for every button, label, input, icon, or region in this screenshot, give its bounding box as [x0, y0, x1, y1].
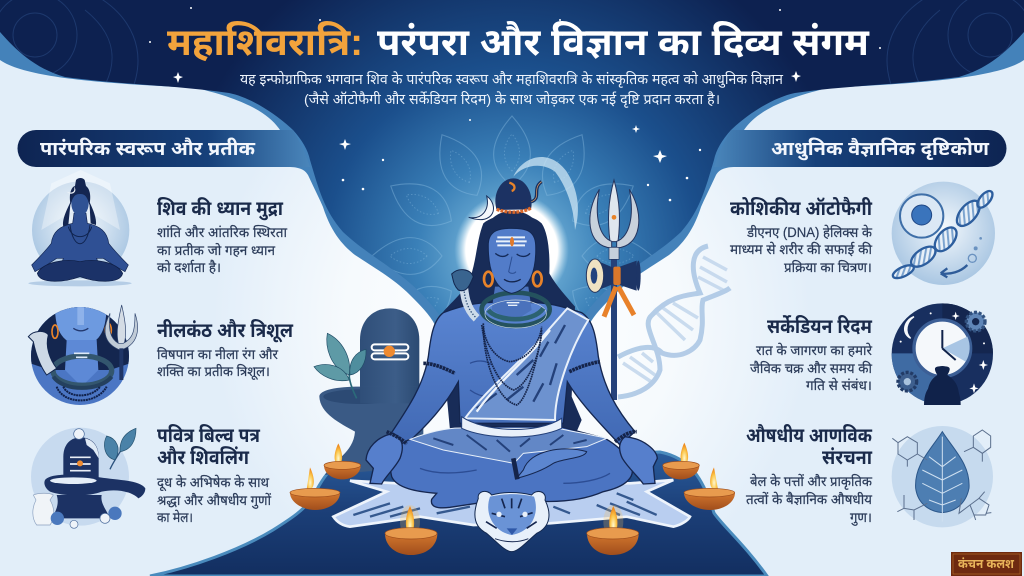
Trishul and damaru: [586, 180, 641, 400]
header: left section pill: पारंपरिक स्वरूप और प्रतीक: [40, 138, 256, 160]
Arm bands: [423, 362, 600, 373]
Foot resting on the thigh: [517, 449, 587, 478]
item: left 1: [157, 196, 287, 275]
item: right 2: गति से संबंध।: [806, 376, 872, 393]
stars in the header: [149, 7, 881, 201]
Tiger head: [475, 491, 549, 552]
item: left 3: [157, 423, 271, 525]
panel: modern science icons: [891, 182, 995, 527]
panel: traditional form icons: [28, 170, 145, 528]
Tiger hide sash across torso: [465, 308, 588, 420]
Bilva leaves at left: [314, 333, 366, 398]
item: right 1: माध्यम से शरीर की सफाई की: [730, 240, 872, 257]
Neck: [492, 287, 532, 322]
title: परंपरा और विज्ञान का दिव्य संगम: [377, 20, 870, 64]
item: right 3: बेल के पत्तों और प्राकृतिक: [750, 472, 873, 491]
Torso and arms: [390, 302, 635, 445]
Ganga water stream: [513, 157, 578, 230]
watermark: brand badge: कंचन कलश: [958, 556, 1015, 571]
title: महाशिवरात्रि:: [167, 20, 363, 64]
item: left 2: विषपान का नीला रंग और: [157, 346, 278, 362]
item: left 1: शांति और आंतरिक स्थिरता: [157, 224, 287, 240]
item: right 1: [730, 196, 873, 275]
Tiger skin rug: [333, 480, 690, 527]
Shivling at left: [319, 308, 423, 475]
item: left 3: श्रद्धा और औषधीय गुणों: [157, 492, 271, 510]
Crescent moon: [469, 196, 494, 220]
item: right 3: औषधीय आणविक: [746, 423, 872, 447]
header: right section pill: आधुनिक वैज्ञानिक दृष्टिकोण: [771, 137, 990, 161]
Face: [488, 228, 536, 293]
header: right section pill: [714, 130, 1006, 167]
DNA helix behind the figure: [618, 246, 730, 397]
icon: meditating Shiva: [28, 170, 132, 286]
header sky: dark navy top shape with glow: [0, 0, 1024, 316]
icon: Shivling, milk pot, bilva leaf: [31, 428, 145, 528]
Diya lamps: [290, 443, 735, 555]
item: left 3: और शिवलिंग: [157, 445, 250, 469]
item: right 3: [746, 423, 873, 527]
icon: cell and DNA helix: [891, 182, 995, 285]
item: left 1: का प्रतीक जो गहन ध्यान: [157, 242, 276, 258]
Crossed legs: [391, 427, 632, 508]
central figure scene: [290, 157, 735, 555]
item: left 2: शक्ति का प्रतीक त्रिशूल।: [157, 363, 270, 381]
subtitle: यह इन्फोग्राफिक भगवान शिव के पारंपरिक स्वरूप और महाशिवरात्रि के सांस्कृतिक महत्व को आधुनिक विज्ञान: [240, 70, 783, 89]
Hair falling behind the shoulders: [442, 215, 582, 432]
halo behind the head: [454, 193, 569, 307]
Snake coiled around the neck: [452, 270, 550, 328]
item: right 3: संरचना: [822, 445, 873, 469]
Beaded necklaces: [482, 323, 542, 405]
item: right 2: रात के जागरण का हमारे: [756, 341, 872, 358]
Anklet: [513, 458, 517, 479]
item: right 3: गुण।: [850, 510, 872, 527]
floor of the central scene: [150, 452, 767, 576]
Lap cloth with fur edges: [410, 428, 607, 463]
Earrings: [484, 272, 542, 286]
item: right 1: कोशिकीय ऑटोफैगी: [730, 196, 873, 220]
item: left 3: पवित्र बिल्व पत्र: [157, 423, 261, 447]
icon: circadian clock: [891, 303, 994, 407]
Hair top and bun: [484, 178, 542, 238]
item: right 2: जैविक चक्र और समय की: [750, 360, 872, 376]
mandala: top corners and centre, clipped to the sky: [0, 0, 1024, 396]
item: right 1: प्रक्रिया का चित्रण।: [784, 259, 872, 275]
item: left 2: [157, 318, 294, 381]
item: right 2: सर्केडियन रिदम: [767, 314, 873, 338]
item: left 3: दूध के अभिषेक के साथ: [157, 473, 269, 491]
subtitle: (जैसे ऑटोफैगी और सर्केडियन रिदम) के साथ जोड़कर एक नई दृष्टि प्रदान करता है।: [304, 90, 720, 108]
icon: Neelkanth and trident: [28, 305, 138, 407]
item: left 3: का मेल।: [157, 508, 193, 525]
item: right 3: तत्वों के बैज्ञानिक औषधीय: [746, 490, 873, 507]
item: right 2: [750, 314, 873, 393]
icon: leaf and molecules: [892, 426, 993, 527]
item: left 1: शिव की ध्यान मुद्रा: [157, 196, 284, 221]
header: left section pill: [18, 130, 310, 167]
Hands: [366, 432, 657, 484]
item: left 2: नीलकंठ और त्रिशूल: [157, 318, 294, 343]
item: left 1: को दर्शाता है।: [157, 259, 221, 275]
watermark: brand badge: [951, 552, 1022, 576]
White waist band: [462, 417, 562, 437]
item: right 1: डीएनए (DNA) हेलिक्स के: [746, 223, 873, 240]
header band: blue edge of the top shape: [0, 0, 1024, 325]
subtitle: [240, 70, 783, 108]
